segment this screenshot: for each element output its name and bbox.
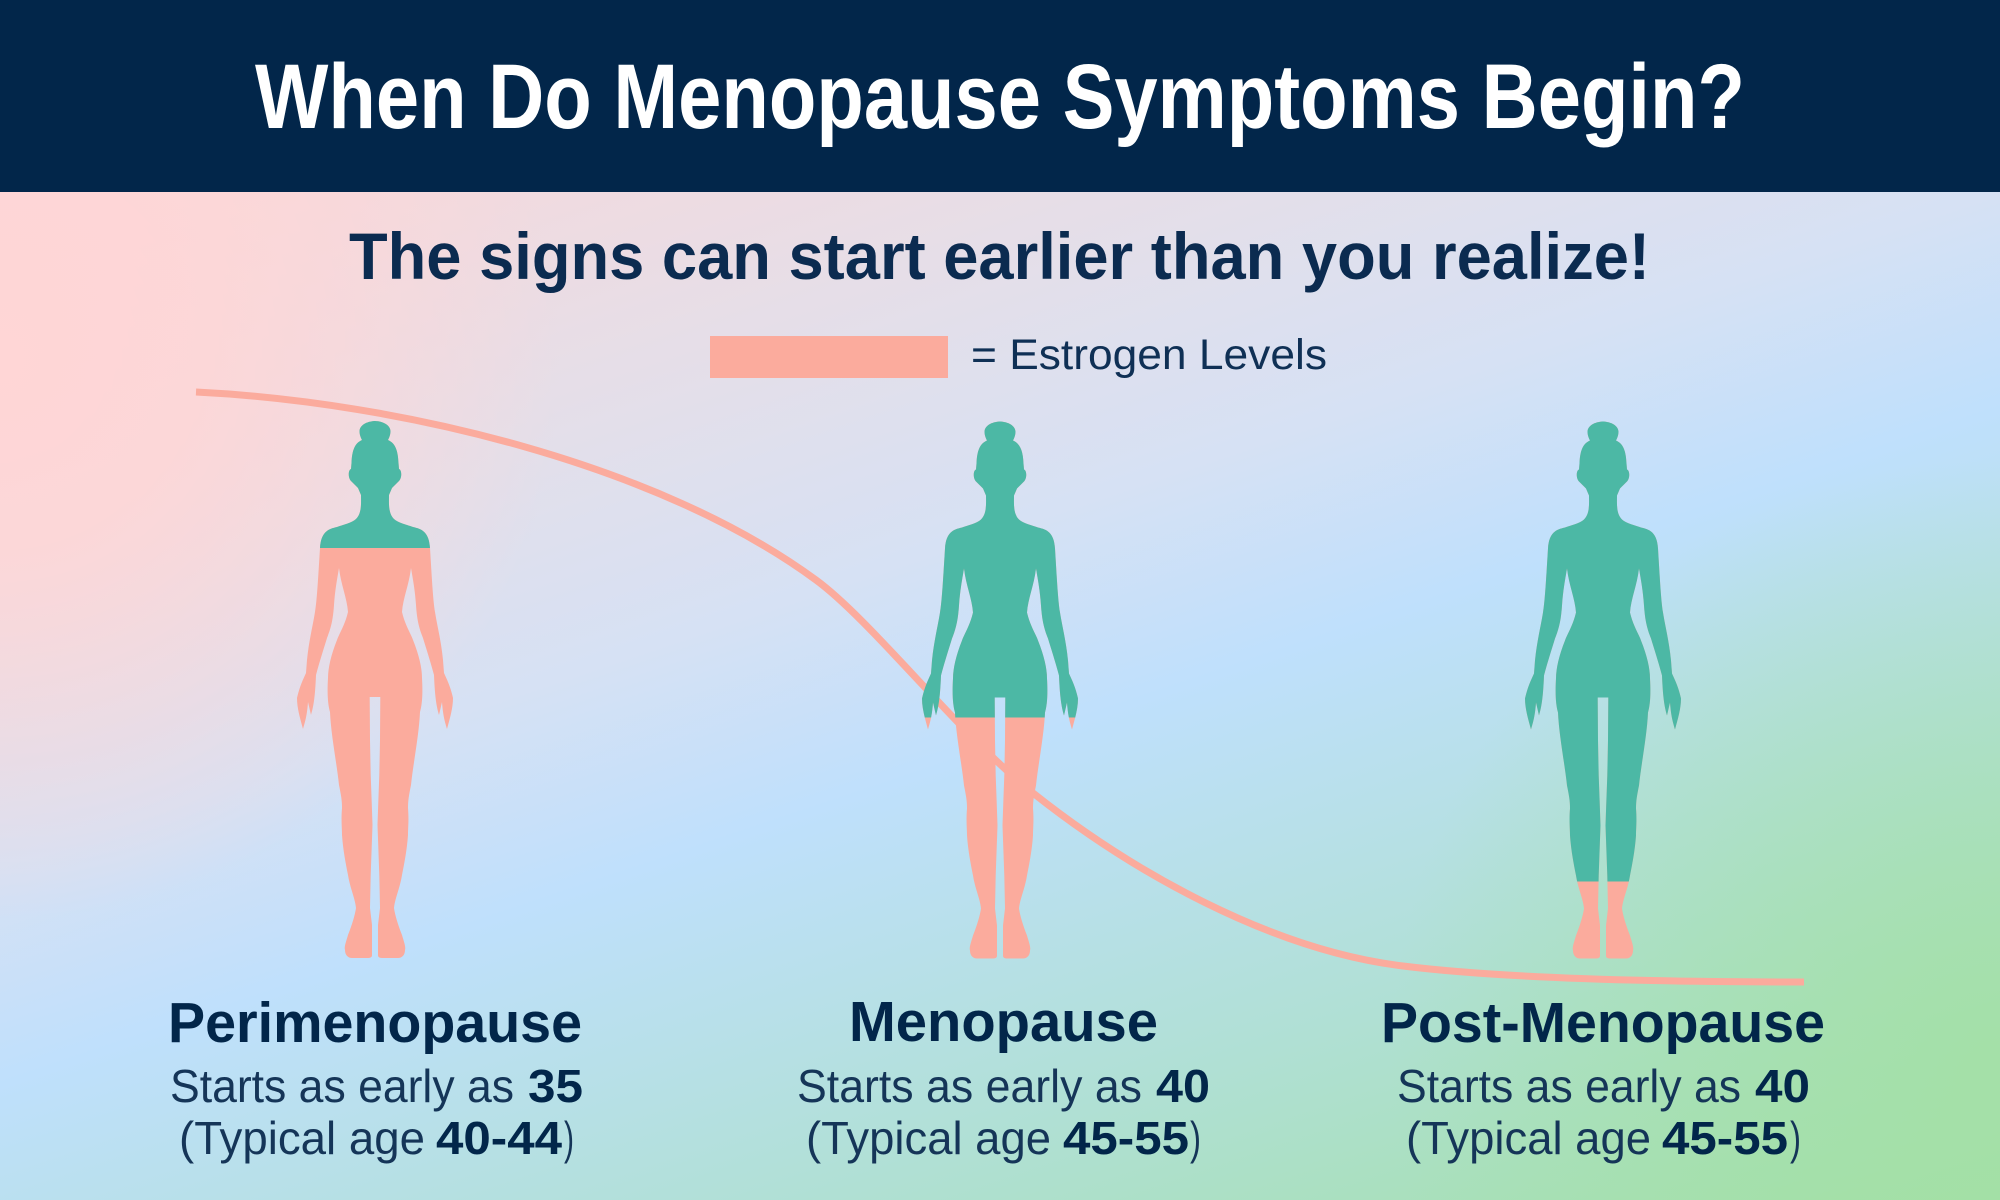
label: perimenopause: Perimenopause (168, 991, 582, 1055)
label: menopause: ) (1190, 1112, 1201, 1164)
subtitle: The signs can start earlier than you realize! (349, 219, 1650, 293)
label: perimenopause: 40-44 (436, 1112, 562, 1164)
estrogen decline curve (196, 392, 1804, 982)
legend: estrogen levels: = Estrogen Levels (971, 331, 1327, 379)
label: post-menopause: Post-Menopause (1381, 991, 1825, 1055)
title banner (0, 0, 2000, 192)
label: post-menopause: Starts as early as (1397, 1060, 1741, 1112)
label: post-menopause: 40 (1755, 1060, 1810, 1112)
title banner: When Do Menopause Symptoms Begin? (255, 46, 1745, 148)
figure: perimenopause (297, 421, 453, 958)
legend: estrogen levels (710, 331, 1327, 379)
figure: post-menopause (1525, 422, 1681, 958)
label: menopause: 45-55 (1063, 1112, 1189, 1164)
label: post-menopause: 45-55 (1662, 1112, 1788, 1164)
label: post-menopause: ) (1790, 1112, 1801, 1164)
label: menopause (797, 990, 1210, 1164)
label: perimenopause: Starts as early as (170, 1060, 514, 1112)
label: menopause: Starts as early as (797, 1060, 1142, 1112)
label: menopause: 40 (1156, 1060, 1210, 1112)
label: post-menopause (1381, 991, 1825, 1164)
label: menopause: (Typical age (806, 1112, 1051, 1164)
label: perimenopause: 35 (528, 1060, 583, 1112)
label: menopause: Menopause (849, 990, 1158, 1054)
label: perimenopause: ) (564, 1112, 574, 1164)
label: perimenopause (168, 991, 583, 1164)
label: post-menopause: (Typical age (1406, 1112, 1651, 1164)
label: perimenopause: (Typical age (179, 1112, 425, 1164)
figure: menopause (922, 422, 1078, 958)
